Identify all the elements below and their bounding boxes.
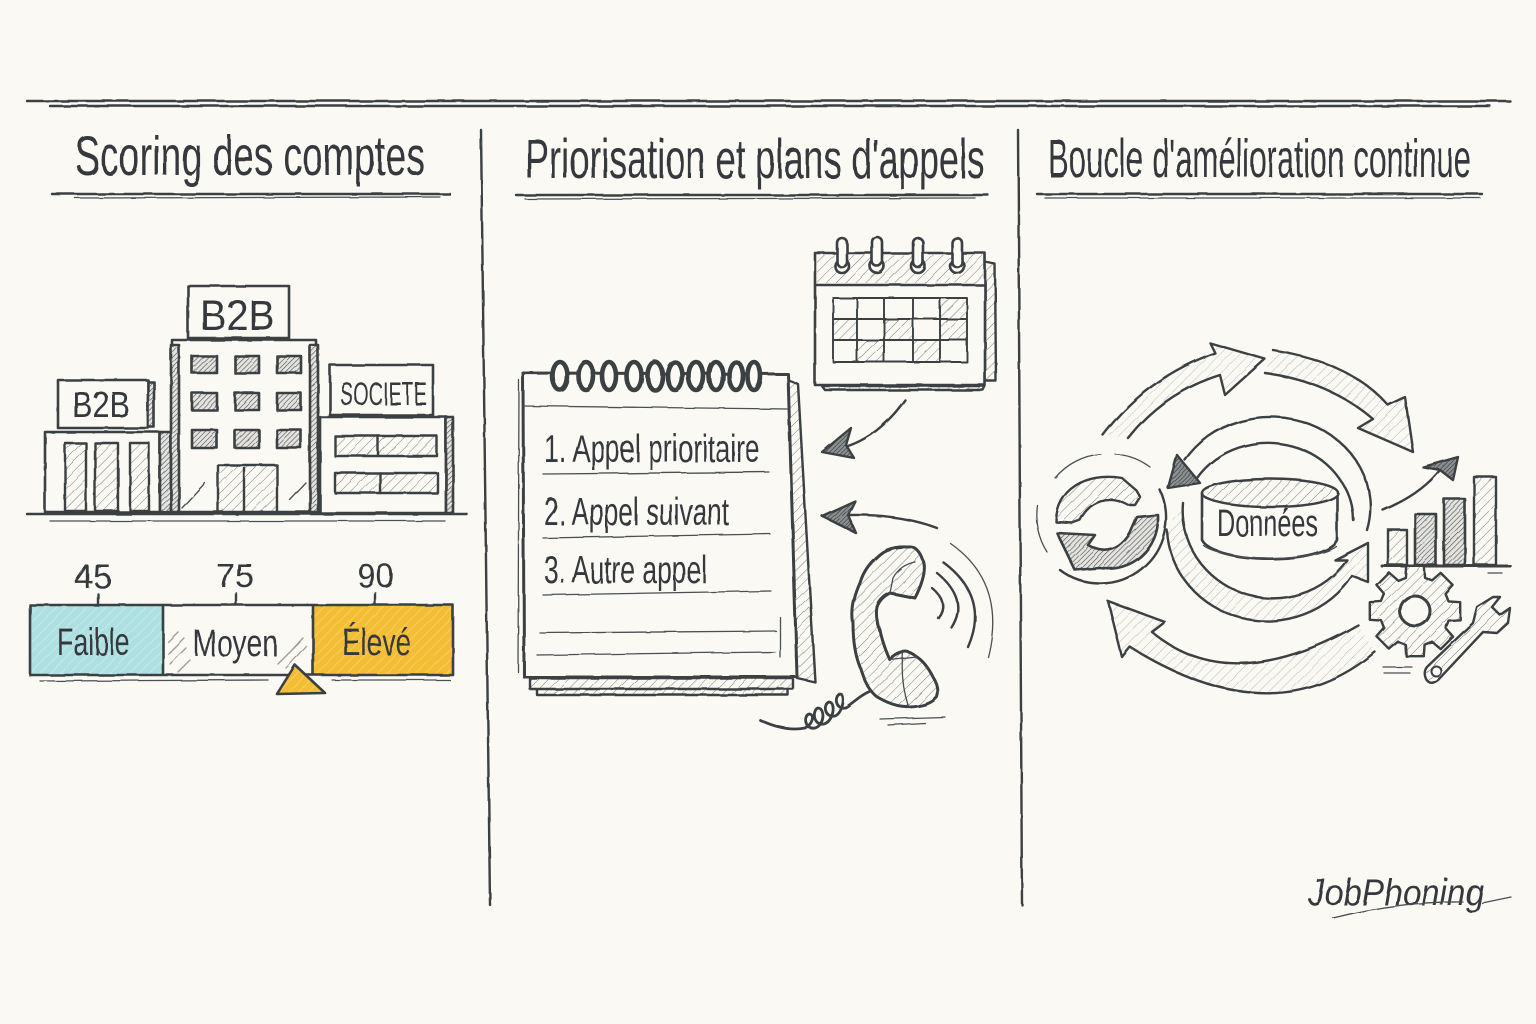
growth arrow [1383, 457, 1458, 510]
icon: wrench [1425, 597, 1510, 683]
signal waves [932, 543, 993, 657]
heading: scoring: Scoring des comptes [75, 124, 425, 187]
icon: right building [320, 365, 453, 513]
heading: priorisation: Priorisation et plans d'appels [525, 127, 985, 190]
center loop [1167, 417, 1370, 621]
phone cord [760, 692, 870, 729]
icon: data cylinder [1202, 479, 1338, 559]
arrow: inner bottom [1167, 503, 1368, 621]
icon: refresh circle [1036, 454, 1166, 584]
arrow: inner top [1168, 417, 1370, 530]
column divider right [1018, 130, 1022, 905]
panel: priorisation et plans d'appels [516, 127, 996, 729]
segment: faible [31, 606, 163, 674]
icon: calendar [815, 237, 996, 390]
icon: spiral notepad [518, 362, 815, 695]
icon: right building: SOCIETE [340, 376, 427, 412]
column divider left [481, 130, 490, 905]
panel: scoring des comptes [27, 124, 467, 694]
segment: faible: Faible [57, 622, 130, 664]
logo: jobphoning: JobPhoning [1307, 872, 1484, 913]
tick label 75: 75 [216, 557, 254, 594]
icon: central building: B2B [200, 292, 275, 340]
panel: boucle d'amelioration continue [1036, 129, 1511, 918]
icon: telephone handset [760, 543, 993, 729]
segment: eleve [313, 606, 453, 674]
top double rule [27, 101, 1510, 106]
icon: central building [171, 286, 318, 512]
arrow: calendar to notepad [822, 400, 905, 458]
marker triangle [277, 665, 325, 694]
segment: moyen [163, 606, 313, 674]
list item 2: 2. Appel suivant [544, 491, 729, 534]
rings [552, 362, 760, 390]
score scale [30, 557, 453, 694]
segment: eleve: Élevé [342, 621, 411, 664]
icon: left building: B2B [72, 384, 130, 425]
arrow: outer top left [1103, 343, 1265, 438]
label: donnees: Données [1217, 503, 1318, 545]
icon: bar chart [1382, 457, 1510, 573]
list item 3: 3. Autre appel [544, 549, 707, 592]
arrow: outer top right [1265, 350, 1413, 452]
tick label 45: 45 [74, 558, 112, 595]
list item 1: 1. Appel prioritaire [544, 428, 760, 471]
arrow: outer bottom [1108, 601, 1375, 693]
arrow: phone to notepad [822, 501, 937, 533]
segment: moyen: Moyen [193, 623, 278, 665]
icon: left building [45, 380, 171, 512]
tick label 90: 90 [357, 557, 394, 594]
ground line [27, 514, 467, 521]
icon: gear [1370, 566, 1460, 673]
